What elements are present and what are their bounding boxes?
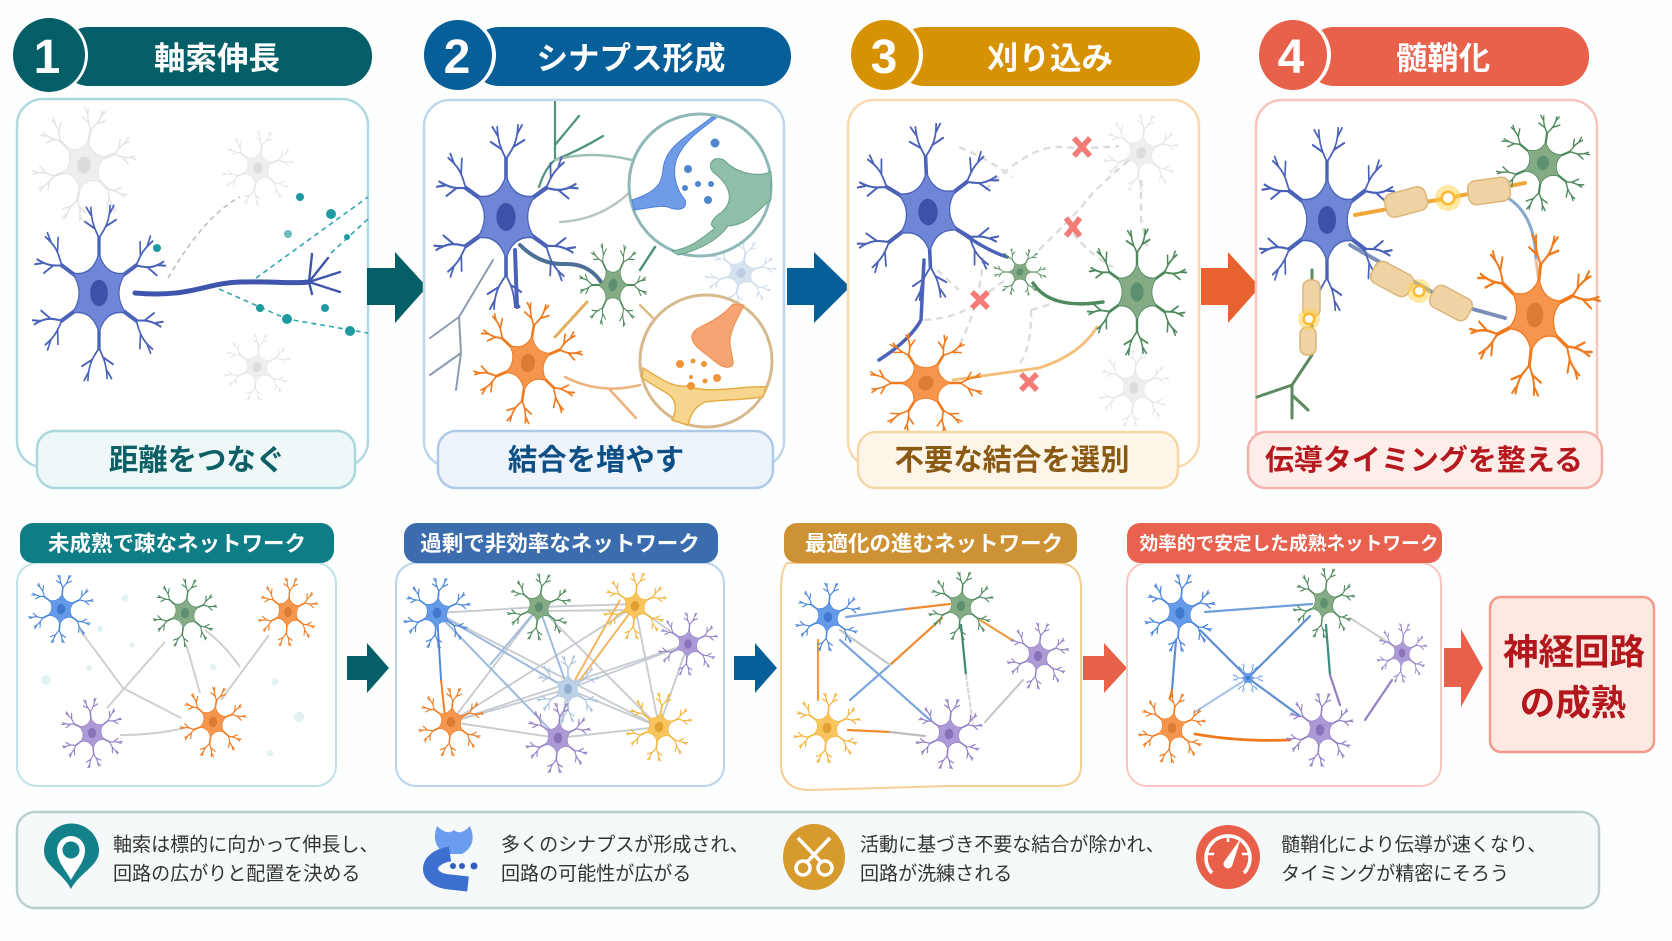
refined links bbox=[818, 604, 1023, 736]
neuron: green bbox=[1491, 109, 1595, 217]
neuron: green bbox=[568, 227, 658, 343]
neuron: blue hub bbox=[1228, 658, 1268, 698]
neuron: green bbox=[1290, 564, 1358, 642]
network stage 3: optimising bbox=[781, 523, 1081, 790]
icon: synapse bbox=[430, 826, 478, 884]
neuron: gray top bbox=[1100, 109, 1182, 197]
network stage 1: immature sparse bbox=[17, 523, 336, 786]
panel: synapse formation illustration bbox=[424, 100, 784, 467]
neuron: purple right bbox=[656, 610, 720, 678]
neuron: purple bottom bbox=[913, 696, 985, 772]
icon: scissors bbox=[783, 824, 845, 890]
step 2: synapse formation bbox=[422, 18, 791, 488]
neuron: purple right bbox=[1004, 619, 1072, 693]
icon: speed gauge bbox=[1196, 825, 1260, 889]
background particles bbox=[41, 594, 304, 756]
neuron: blue bbox=[1142, 571, 1218, 655]
result box: mature neural circuit: の成熟 bbox=[1520, 683, 1626, 723]
neuron: blue bbox=[851, 120, 1005, 304]
panel: optimising network bbox=[781, 563, 1081, 790]
neuron: purple bottom bbox=[1284, 690, 1356, 770]
pruned dashed connections bbox=[924, 146, 1148, 367]
caption: step 1 bbox=[37, 431, 355, 488]
panel: sparse network bbox=[17, 563, 336, 786]
kept connections bbox=[879, 228, 1103, 380]
guidance molecules bbox=[153, 193, 355, 336]
step 1: axon growth bbox=[10, 16, 372, 488]
summary panel bbox=[17, 812, 1599, 908]
caption: step 4 bbox=[1248, 432, 1602, 488]
caption: step 3: 不要な結合を選別 bbox=[894, 444, 1130, 477]
label: stage 2 bbox=[404, 523, 718, 563]
header: step 2: シナプス形成 bbox=[536, 40, 726, 76]
arrow: stage 3 to 4 bbox=[1083, 643, 1127, 693]
label: stage 2: 過剰で非効率なネットワーク bbox=[420, 532, 700, 556]
header: step 2 bbox=[422, 18, 791, 92]
label: stage 4: 効率的で安定した成熟ネットワーク bbox=[1140, 533, 1438, 554]
arrow: stage 1 to 2 bbox=[347, 643, 389, 693]
neuron: amber bbox=[601, 570, 669, 642]
text: pruning summary: 回路が洗練される bbox=[860, 863, 1012, 885]
neuron: orange bbox=[1135, 689, 1209, 767]
network stage 4: efficient mature bbox=[1127, 523, 1442, 786]
label: stage 3 bbox=[784, 523, 1077, 563]
neuron: purple bbox=[58, 696, 126, 770]
panel: axon growth illustration bbox=[17, 97, 368, 467]
label: stage 1 bbox=[20, 523, 334, 563]
neuron: purple bottom bbox=[523, 700, 593, 776]
header: step 3 bbox=[849, 18, 1200, 92]
text: myelin summary: タイミングが精密にそろう bbox=[1281, 863, 1509, 885]
neuron: blue growing neuron bbox=[32, 206, 166, 380]
text: synapse summary: 多くのシナプスが形成され、 bbox=[501, 834, 749, 856]
header: step 4 bbox=[1257, 18, 1589, 92]
efficient links bbox=[1170, 604, 1392, 740]
text: axon summary: 軸索は標的に向かって伸長し、 bbox=[113, 834, 378, 856]
neuron: yellow bbox=[791, 690, 863, 766]
neuron: gray bottom bbox=[1096, 346, 1172, 430]
header: step 3: 3 bbox=[871, 31, 897, 84]
magnifier: orange to yellow synapse bbox=[640, 295, 772, 427]
neuron: orange centre bbox=[176, 682, 250, 762]
text: pruning summary: 活動に基づき不要な結合が除かれ、 bbox=[860, 834, 1165, 856]
neuron: pale blue hub bbox=[537, 656, 599, 722]
neuron: green bbox=[150, 575, 220, 651]
axons bbox=[1257, 183, 1540, 418]
axon with growth cone bbox=[135, 254, 340, 294]
text: axon summary bbox=[113, 834, 378, 885]
myelin sheaths bbox=[1300, 176, 1511, 355]
text: pruning summary bbox=[860, 834, 1165, 885]
network stage 2: excessive inefficient bbox=[396, 523, 724, 786]
caption: step 4: 伝導タイミングを整える bbox=[1265, 444, 1583, 477]
caption: step 2: 結合を増やす bbox=[508, 444, 684, 477]
neuron: blue bbox=[401, 575, 473, 651]
panel: myelination illustration bbox=[1256, 100, 1607, 467]
panel: dense network bbox=[396, 563, 724, 786]
neurites and connections bbox=[430, 102, 660, 418]
neuron: orange bbox=[1463, 224, 1607, 406]
neuron: orange bbox=[416, 685, 486, 759]
neuron: pale blue background bbox=[700, 235, 782, 311]
removal marks bbox=[972, 138, 1090, 390]
header: step 1 bbox=[10, 16, 372, 94]
caption: step 3 bbox=[858, 432, 1178, 488]
neuron: orange bbox=[467, 293, 589, 433]
magnifier: blue to green synapse bbox=[629, 114, 771, 256]
text: axon summary: 回路の広がりと配置を決める bbox=[113, 863, 360, 885]
arrow: step 1 to 2 bbox=[367, 252, 427, 323]
neuron: faded gray bottom bbox=[221, 331, 293, 403]
neuron: small green bbox=[985, 239, 1055, 305]
text: synapse summary: 回路の可能性が広がる bbox=[501, 863, 691, 885]
dashed guidance paths bbox=[168, 197, 368, 333]
icon: location pin bbox=[44, 824, 99, 889]
panel: pruning illustration bbox=[848, 100, 1199, 467]
result box: mature neural circuit: 神経回路 bbox=[1503, 632, 1645, 672]
arrow: step 2 to 3 bbox=[787, 252, 850, 323]
arrow: to mature circuit bbox=[1444, 629, 1483, 707]
neuron: faded gray top right bbox=[218, 125, 298, 211]
neuron: purple right bbox=[1375, 621, 1429, 685]
text: synapse summary bbox=[501, 834, 749, 885]
dense links bbox=[437, 600, 688, 738]
label: stage 4 bbox=[1127, 523, 1442, 563]
neuron: blue presynaptic bbox=[433, 125, 579, 309]
nodes of Ranvier bbox=[1298, 185, 1461, 330]
neuron: faded gray top left bbox=[24, 97, 144, 233]
neuron: green bbox=[504, 570, 574, 644]
neuron: orange bbox=[851, 314, 1001, 452]
header: step 3: 刈り込み bbox=[987, 40, 1113, 76]
caption: step 2 bbox=[438, 431, 773, 488]
arrow: step 3 to 4 bbox=[1201, 252, 1260, 323]
neuron: blue bbox=[793, 580, 863, 654]
neuron: blue bbox=[1259, 128, 1395, 312]
sparse links bbox=[80, 630, 269, 735]
label: stage 1: 未成熟で疎なネットワーク bbox=[48, 532, 306, 556]
header: step 4: 髄鞘化 bbox=[1396, 40, 1490, 76]
neuron: orange top bbox=[256, 575, 320, 649]
header: step 1: 軸索伸長 bbox=[154, 40, 280, 76]
neuron: yellow bbox=[623, 689, 695, 765]
text: myelin summary bbox=[1281, 834, 1546, 885]
neuron: blue bbox=[26, 572, 96, 646]
caption: step 1: 距離をつなぐ bbox=[109, 444, 285, 477]
label: stage 3: 最適化の進むネットワーク bbox=[805, 532, 1063, 556]
header: step 1: 1 bbox=[34, 31, 60, 84]
step 3: pruning bbox=[848, 18, 1200, 488]
panel: mature network bbox=[1127, 563, 1441, 786]
header: step 2: 2 bbox=[444, 31, 470, 84]
arrow: stage 2 to 3 bbox=[734, 643, 777, 693]
step 4: myelination bbox=[1248, 18, 1607, 488]
text: myelin summary: 髄鞘化により伝導が速くなり、 bbox=[1281, 834, 1546, 856]
header: step 4: 4 bbox=[1278, 31, 1305, 84]
neuron: large green bbox=[1087, 229, 1187, 355]
result box: mature neural circuit bbox=[1490, 597, 1654, 752]
neuron: green bbox=[926, 569, 996, 643]
